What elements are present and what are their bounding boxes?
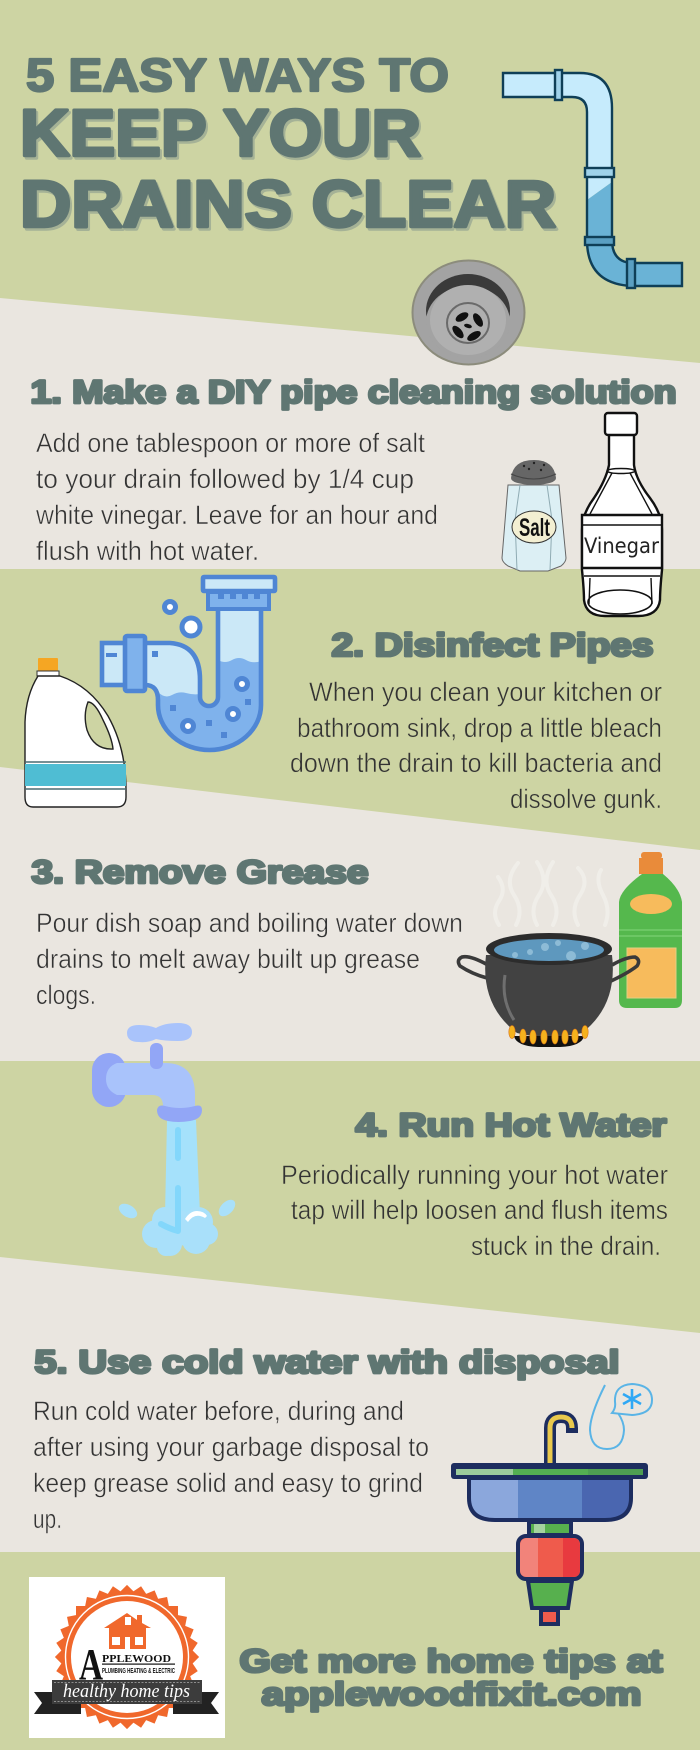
text: step 3 body: Pour dish soap and boiling water down xyxy=(36,908,463,938)
icon: cold water drop xyxy=(590,1384,652,1449)
panel: step 4 band xyxy=(0,1061,700,1333)
text: step 2 body: bathroom sink, drop a little bleach xyxy=(297,713,662,743)
footer call to action: applewoodfixit.com xyxy=(262,1676,642,1712)
icon: vinegar bottle xyxy=(582,413,662,616)
panel: step 2 band xyxy=(0,569,700,850)
title line 3: DRAINS CLEAR xyxy=(20,166,556,240)
title line 1: 5 EASY WAYS TO xyxy=(26,49,449,101)
text: step 2 body xyxy=(290,677,662,814)
text: step 1 body: flush with hot water. xyxy=(36,536,259,566)
title line 2: KEEP YOUR xyxy=(20,96,421,170)
title line 3: DRAINS CLEAR xyxy=(22,169,558,243)
text: step 3 body: clogs. xyxy=(36,980,96,1010)
icon: boiling pot xyxy=(458,933,639,1047)
text: step 1 body xyxy=(35,428,438,566)
text: step 5 body xyxy=(33,1396,429,1534)
title xyxy=(20,49,558,243)
panel: header band xyxy=(0,0,700,363)
icon: steam xyxy=(495,862,608,925)
text: step 1 body: to your drain followed by 1/4 cup xyxy=(36,464,414,494)
text: step 2 body: When you clean your kitchen or xyxy=(309,677,662,707)
icon: p-trap pipe xyxy=(102,577,275,750)
logo seal xyxy=(55,1585,199,1729)
icon: drain xyxy=(412,260,524,364)
heading: step 5: 5. Use cold water with disposal xyxy=(34,1344,620,1380)
icon: dish soap bottle xyxy=(619,852,682,1008)
text: step 5 body: after using your garbage disposal to xyxy=(33,1432,429,1462)
footer call to action xyxy=(240,1643,663,1712)
heading: step 3: 3. Remove Grease xyxy=(32,854,368,890)
logo ribbon xyxy=(34,1692,219,1714)
icon: vinegar bottle: Vinegar xyxy=(584,534,659,558)
icon: pipe xyxy=(503,70,682,288)
icon: bleach bottle xyxy=(25,658,126,807)
icon: sink xyxy=(451,1417,648,1624)
text: step 1 body: white vinegar. Leave for an hour and xyxy=(35,500,438,530)
text: step 4 body: stuck in the drain. xyxy=(471,1231,661,1261)
text: step 5 body: up. xyxy=(33,1504,62,1534)
text: step 3 body xyxy=(36,908,463,1010)
heading: step 1: 1. Make a DIY pipe cleaning solution xyxy=(30,374,676,410)
text: step 4 body: Periodically running your hot water xyxy=(281,1160,668,1190)
icon: water tap xyxy=(92,1023,238,1256)
text: step 1 body: Add one tablespoon or more of salt xyxy=(36,428,425,458)
heading: step 2: 2. Disinfect Pipes xyxy=(332,627,654,663)
logo: Applewood healthy home tips xyxy=(29,1577,225,1738)
text: step 4 body xyxy=(281,1160,668,1261)
logo wordmark: A xyxy=(79,1640,103,1689)
text: step 4 body: tap will help loosen and flush items xyxy=(291,1195,668,1225)
text: step 2 body: down the drain to kill bacteria and xyxy=(290,748,662,778)
logo: Applewood healthy home tips: PPLEWOOD xyxy=(102,1653,171,1665)
text: step 5 body: Run cold water before, during and xyxy=(33,1396,404,1426)
logo house xyxy=(104,1613,151,1649)
text: step 3 body: drains to melt away built up grease xyxy=(36,944,420,974)
heading: step 4: 4. Run Hot Water xyxy=(356,1107,666,1143)
title line 2: KEEP YOUR xyxy=(22,98,423,172)
panel: footer band xyxy=(0,1552,700,1750)
icon: salt shaker: Salt xyxy=(519,514,550,542)
logo: Applewood healthy home tips: healthy home tips xyxy=(63,1681,190,1702)
icon: salt shaker xyxy=(502,460,566,571)
footer call to action: Get more home tips at xyxy=(240,1643,663,1679)
logo: Applewood healthy home tips: PLUMBING HEATING & ELECTRIC xyxy=(102,1668,175,1675)
text: step 2 body: dissolve gunk. xyxy=(510,784,662,814)
text: step 5 body: keep grease solid and easy to grind xyxy=(33,1468,423,1498)
